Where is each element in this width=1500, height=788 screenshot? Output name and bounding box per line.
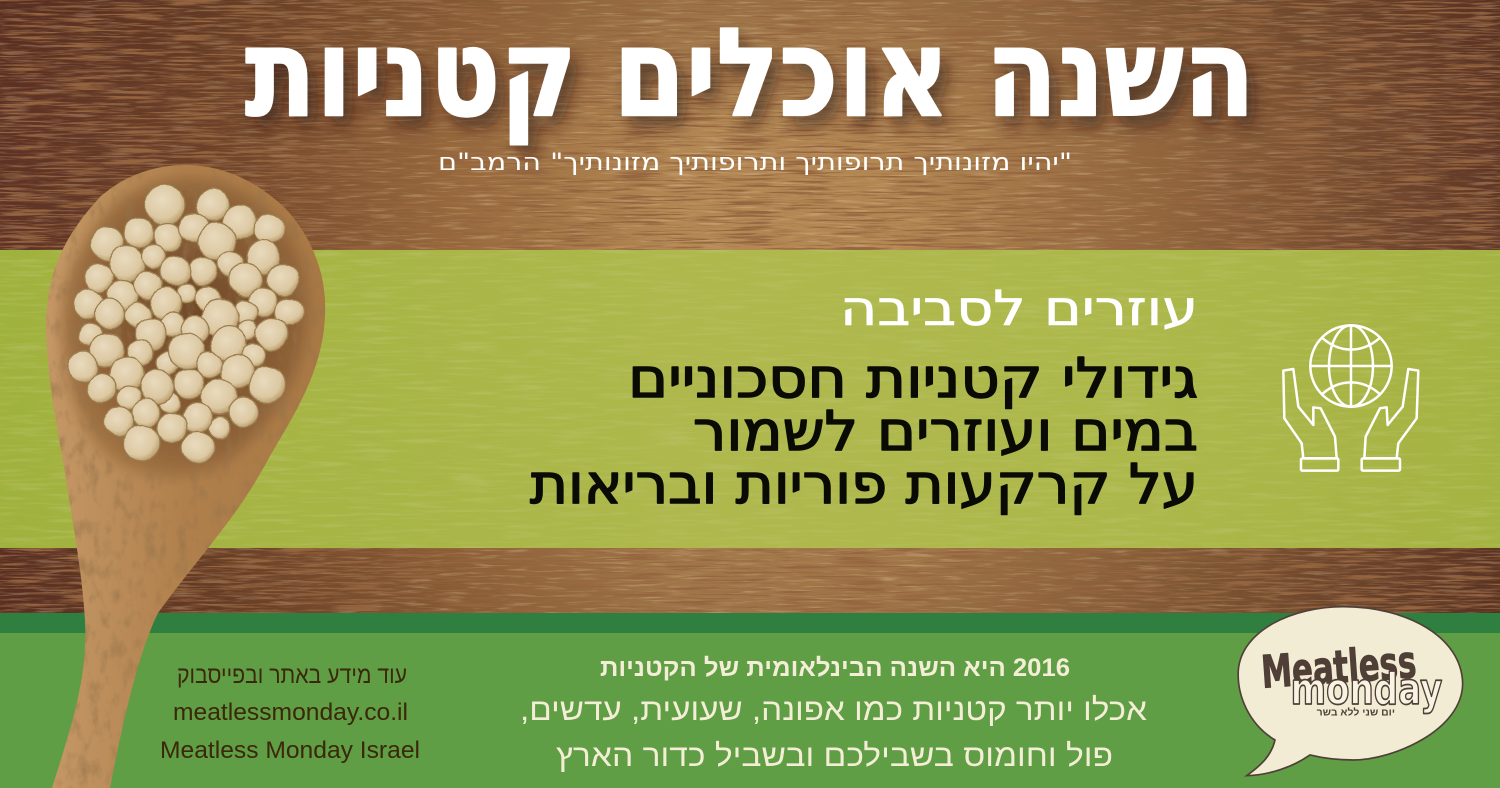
logo: Meatless Monday speech bubble xyxy=(1238,607,1463,776)
logo: Meatless Monday speech bubble: monday xyxy=(1291,665,1442,715)
panel: footer xyxy=(0,613,1500,788)
text block: main message xyxy=(530,346,1198,516)
wood background xyxy=(0,0,1500,620)
text block: website and facebook: Meatless Monday Israel xyxy=(160,737,420,764)
text block: website and facebook: meatlessmonday.co.il xyxy=(173,699,408,726)
icon: hands holding globe xyxy=(1283,325,1418,471)
text block: international year of pulses xyxy=(520,654,1148,773)
logo: Meatless Monday speech bubble: יום שני ללא בשר xyxy=(1317,708,1395,719)
subtitle quote: "יהיו מזונותיך תרופותיך ותרופותיך מזונותיך" הרמב"ם xyxy=(438,148,1072,176)
icon: wooden spoon with chickpeas xyxy=(46,165,325,788)
text block: main message: גידולי קטניות חסכוניים xyxy=(628,346,1198,410)
logo: Meatless Monday speech bubble: Meatless xyxy=(1260,635,1418,699)
text block: website and facebook xyxy=(160,662,420,764)
title: השנה אוכלים קטניות xyxy=(245,2,1255,144)
text block: international year of pulses: 2016 היא השנה הבינלאומית של הקטניות xyxy=(600,654,1070,682)
text block: main message: על קרקעות פוריות ובריאות xyxy=(530,452,1198,516)
heading: helping the environment: עוזרים לסביבה xyxy=(840,281,1198,337)
text block: website and facebook: עוד מידע באתר ובפייסבוק xyxy=(177,662,407,689)
text block: international year of pulses: פול וחומוס בשבילכם ובשביל כדור הארץ xyxy=(556,738,1113,773)
text block: international year of pulses: אכלו יותר קטניות כמו אפונה, שעועית, עדשים, xyxy=(520,692,1148,727)
text block: main message: במים ועוזרים לשמור xyxy=(693,399,1198,463)
panel: green band xyxy=(0,250,1500,548)
